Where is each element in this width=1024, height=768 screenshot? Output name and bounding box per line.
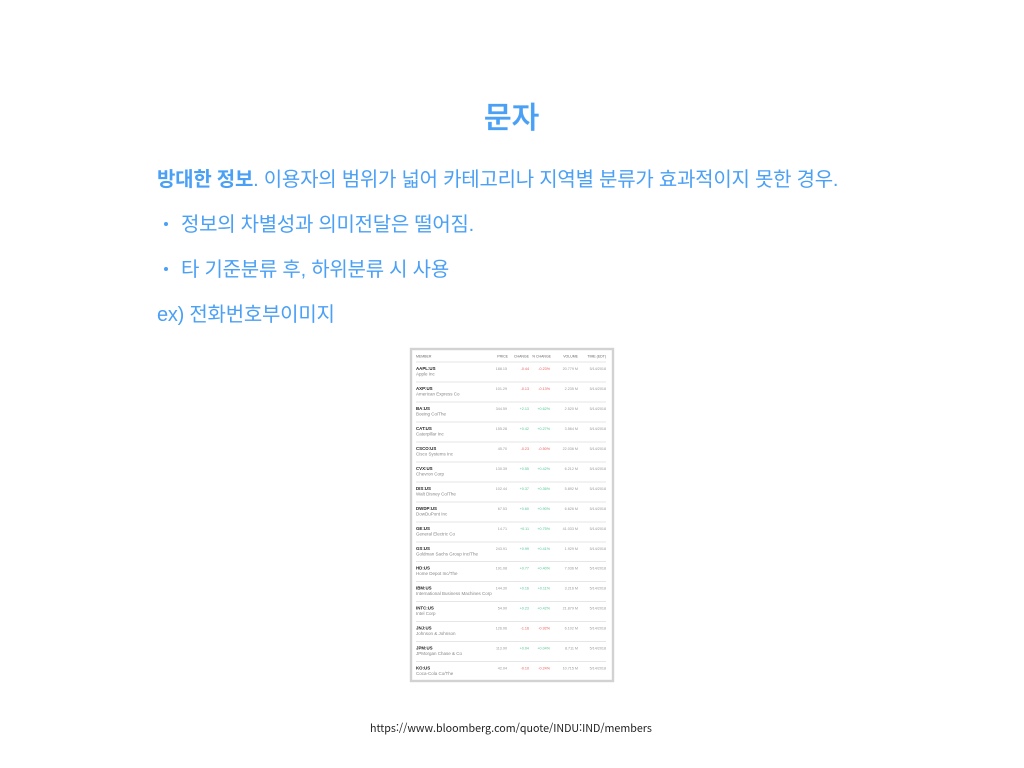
row JNJ: -1.16 <box>521 626 529 630</box>
row AAPL: -0.23% <box>538 367 551 371</box>
source URL: https://www.bloomberg.com/quote/INDU:IND/members <box>370 720 652 736</box>
row JNJ <box>416 626 606 636</box>
row GE: 41.033 M <box>563 527 578 531</box>
row HD: 7.036 M <box>565 566 578 570</box>
row CVX <box>416 466 606 476</box>
row CSCO: Cisco Systems Inc <box>416 452 454 456</box>
row AAPL: 5/14/2018 <box>590 367 606 371</box>
row CVX: 130.39 <box>496 467 507 471</box>
row AAPL <box>416 366 606 376</box>
row IBM: 3.216 M <box>565 586 578 590</box>
row AAPL: Apple Inc <box>416 372 436 376</box>
row DIS: +0.37 <box>520 487 529 491</box>
row GS: 5/14/2018 <box>590 547 606 551</box>
row GE: +0.11 <box>520 527 529 531</box>
row JPM: +0.04 <box>520 646 529 650</box>
row DWDP: 6.626 M <box>565 507 578 511</box>
row GE: +0.75% <box>537 527 551 531</box>
row DWDP: +0.90% <box>537 507 551 511</box>
row KO: -0.24% <box>538 666 551 670</box>
row CVX: Chevron Corp <box>416 472 445 476</box>
row GE: 5/14/2018 <box>590 527 606 531</box>
row HD: Home Depot Inc/The <box>416 571 458 576</box>
row CAT: +0.27% <box>537 427 551 431</box>
row BA: 344.59 <box>496 407 507 411</box>
row CAT: 5/14/2018 <box>590 427 606 431</box>
row HD: HD:US <box>416 566 430 570</box>
row CAT <box>416 426 606 436</box>
table header: PRICE <box>497 354 509 358</box>
row JNJ: -0.92% <box>538 626 551 630</box>
row INTC: Intel Corp <box>416 611 436 616</box>
row CSCO <box>416 446 606 456</box>
row HD: 191.08 <box>496 566 507 570</box>
row JNJ: 6.102 M <box>565 626 578 630</box>
row DWDP: DowDuPont Inc <box>416 512 448 516</box>
row DWDP: 67.53 <box>498 507 507 511</box>
row INTC: INTC:US <box>416 606 434 610</box>
row AAPL: AAPL:US <box>416 366 436 371</box>
table header: CHANGE <box>514 354 530 358</box>
row AAPL: -0.44 <box>521 367 529 371</box>
row JPM: 5/14/2018 <box>590 646 606 650</box>
row BA: 5/14/2018 <box>590 407 606 411</box>
row CVX: 5/14/2018 <box>590 467 606 471</box>
row DWDP <box>416 506 606 516</box>
row GS: GS:US <box>416 546 430 551</box>
row CSCO: 5/14/2018 <box>590 447 606 451</box>
table header <box>416 354 606 358</box>
row CSCO: 22.036 M <box>563 447 578 451</box>
row CAT: +0.42 <box>520 427 529 431</box>
row CVX: CVX:US <box>416 466 433 471</box>
row GS <box>416 546 606 556</box>
row CAT: 3.564 M <box>565 427 578 431</box>
row AXP: American Express Co <box>416 392 460 396</box>
row BA: +0.62% <box>537 407 551 411</box>
row DIS: DIS:US <box>416 486 431 491</box>
row AXP: AXP:US <box>416 386 433 391</box>
row GS: Goldman Sachs Group Inc/The <box>416 552 479 556</box>
row JNJ: JNJ:US <box>416 626 432 630</box>
row IBM: 5/14/2018 <box>590 586 606 590</box>
row DIS: 5.892 M <box>565 487 578 491</box>
row DWDP: +0.60 <box>520 507 529 511</box>
row IBM: IBM:US <box>416 586 432 590</box>
table header: TIME (EDT) <box>587 354 606 358</box>
table header: MEMBER <box>416 354 432 358</box>
row BA <box>416 406 606 416</box>
row GE: 14.71 <box>498 527 507 531</box>
row BA: Boeing Co/The <box>416 412 447 416</box>
row AXP: 5/14/2018 <box>590 387 606 391</box>
title: 문자 <box>484 102 539 135</box>
row GS: +0.41% <box>537 547 551 551</box>
row INTC: 5/14/2018 <box>590 606 606 610</box>
row KO: 5/14/2018 <box>590 666 606 670</box>
row JPM: JPM:US <box>416 646 433 650</box>
row GS: 1.929 M <box>565 547 578 551</box>
row HD: +0.77 <box>520 566 529 570</box>
row CSCO: CSCO:US <box>416 446 436 451</box>
row KO: 42.04 <box>498 666 507 670</box>
row JPM: 8.711 M <box>565 646 578 650</box>
row CSCO: -0.23 <box>521 447 529 451</box>
row AAPL: 20.779 M <box>563 367 578 371</box>
row AXP <box>416 386 606 396</box>
row INTC <box>416 606 606 616</box>
row CSCO: 45.70 <box>498 447 507 451</box>
row GS: +0.99 <box>520 547 529 551</box>
bullet: distinctiveness: 정보의 차별성과 의미전달은 떨어짐. <box>181 214 474 236</box>
row JPM: JPMorgan Chase & Co <box>416 651 463 656</box>
table header: % CHANGE <box>532 354 552 358</box>
row AXP: -0.13% <box>538 387 551 391</box>
row IBM: +0.11% <box>538 586 551 590</box>
row HD <box>416 566 606 576</box>
row DIS: Walt Disney Co/The <box>416 492 456 496</box>
row AXP: 101.29 <box>496 387 507 391</box>
row DWDP: DWDP:US <box>416 506 437 511</box>
row BA: 2.520 M <box>565 407 578 411</box>
row IBM: International Business Machines Corp <box>416 591 492 596</box>
row GS: 243.91 <box>496 547 507 551</box>
row DIS: +0.36% <box>537 487 551 491</box>
row INTC: 21.879 M <box>563 606 578 610</box>
table header: VOLUME <box>563 354 579 358</box>
row CAT: CAT:US <box>416 426 432 431</box>
row JNJ: 126.06 <box>496 626 507 630</box>
row GE: General Electric Co <box>416 532 456 536</box>
row AAPL: 188.15 <box>496 367 507 371</box>
row IBM: 144.30 <box>496 586 507 590</box>
text block: example: ex) 전화번호부이미지 <box>157 304 335 326</box>
row CAT: Caterpillar Inc <box>416 432 445 436</box>
row JPM <box>416 646 606 656</box>
row JNJ: Johnson & Johnson <box>416 631 456 636</box>
row JPM: +0.04% <box>537 646 551 650</box>
row DIS: 102.44 <box>496 487 507 491</box>
row JNJ: 5/14/2018 <box>590 626 606 630</box>
row KO: 10.715 M <box>563 666 578 670</box>
text block: intro sentence: 방대한 정보. 이용자의 범위가 넓어 카테고리나 지역별 분류가 효과적이지 못한 경우. <box>157 169 838 191</box>
row HD: +0.40% <box>537 566 551 570</box>
row INTC: +0.23 <box>520 606 529 610</box>
row CAT: 155.28 <box>496 427 507 431</box>
row CVX: 6.212 M <box>565 467 578 471</box>
row HD: 5/14/2018 <box>590 566 606 570</box>
row KO: Coca-Cola Co/The <box>416 671 454 676</box>
row DWDP: 5/14/2018 <box>590 507 606 511</box>
row DIS <box>416 486 606 496</box>
row BA: BA:US <box>416 406 430 411</box>
row KO: KO:US <box>416 666 430 670</box>
bullet: usage: 타 기준분류 후, 하위분류 시 사용 <box>181 259 449 281</box>
row KO: -0.10 <box>521 666 529 670</box>
row IBM <box>416 586 606 596</box>
row IBM: +0.16 <box>520 586 529 590</box>
row CVX: +0.55 <box>520 467 529 471</box>
row AXP: 2.235 M <box>565 387 578 391</box>
row JPM: 113.90 <box>496 646 507 650</box>
row KO <box>416 666 606 676</box>
row GE: GE:US <box>416 526 430 531</box>
row DIS: 5/14/2018 <box>590 487 606 491</box>
row AXP: -0.13 <box>521 387 529 391</box>
row INTC: +0.42% <box>537 606 551 610</box>
row BA: +2.13 <box>520 407 529 411</box>
row CVX: +0.42% <box>537 467 551 471</box>
row INTC: 54.90 <box>498 606 507 610</box>
row CSCO: -0.50% <box>538 447 551 451</box>
row GE <box>416 526 606 536</box>
